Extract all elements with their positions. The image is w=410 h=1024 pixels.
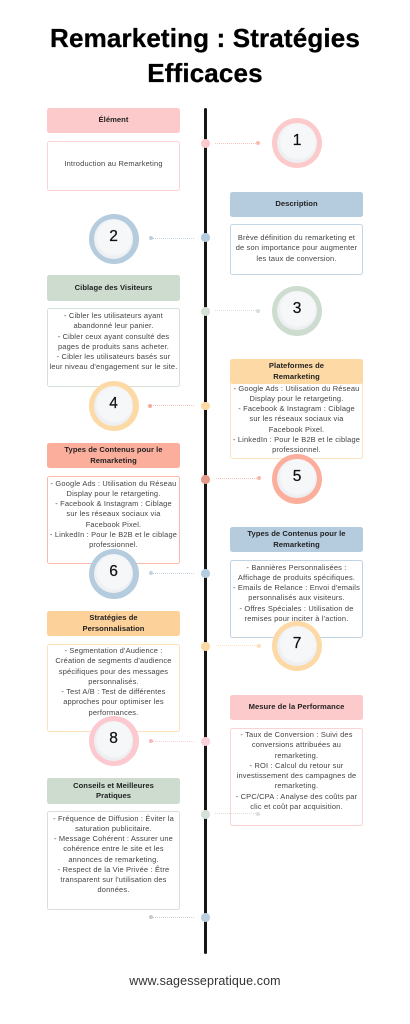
panel: types de contenus text left: professionnel. [89,540,138,549]
panel: plateformes text: professionnel. [272,445,321,454]
connector 3 [215,309,260,313]
marker 4 [201,402,210,410]
badge 3 [272,286,322,336]
panel: ciblage text: pages de produits sans acheter. [58,342,169,351]
panel: personnalisation text: performances. [89,708,138,716]
panel: plateformes text: Display pour le retargeting. [250,394,343,403]
panel: ciblage text: - Cibler les utilisateurs ayant [64,311,163,320]
connector 9 [215,812,260,816]
panel: plateformes text: Facebook Pixel. [269,424,324,434]
panel: types de contenus text left: - Google Ads : Utilisation du Réseau [51,478,176,488]
badge 7: 7 [293,635,301,652]
badge 4 [88,381,138,431]
panel: conseils heading: Conseils et Meilleures [73,780,154,790]
marker 8 [201,737,210,746]
panel: performance text: remarketing. [275,750,318,760]
panel: description heading [230,192,363,217]
title [50,23,360,88]
connector 2 [149,236,194,240]
panel: plateformes text [230,376,363,459]
panel: plateformes text: sur les réseaux sociaux via [249,414,344,423]
panel: description text: les taux de conversion. [256,254,337,262]
marker 10 [201,913,210,922]
badge 8: 8 [109,730,118,747]
panel: types de contenus text left: sur les réseaux sociaux via [66,509,161,518]
badge 3: 3 [293,300,301,317]
footer url: www.sagessepratique.com [129,974,281,988]
badge 2: 2 [109,228,118,245]
panel: conseils text: - Message Cohérent : Assurer une [54,834,173,843]
panel: personnalisation text: spécifiques pour des messages [59,666,168,676]
panel: types de contenus text right: - Offres Spéciales : Utilisation de [239,604,354,612]
panel: element heading [47,108,180,133]
panel: types de contenus text left: - LinkedIn : Pour le B2B et le ciblage [50,530,177,539]
panel: ciblage text [47,308,180,387]
connector 4 [148,404,194,408]
panel: performance text: - CPC/CPA : Analyse des coûts par [236,792,357,800]
panel: types de contenus heading right: Types de Contenus pour le [247,529,346,538]
panel: types de contenus text left: - Facebook & Instagram : Ciblage [55,499,172,508]
panel: performance text: conversions attribuées au [252,740,341,749]
panel: conseils text: - Fréquence de Diffusion : Éviter la [53,814,174,822]
panel: personnalisation heading [47,611,180,636]
panel: plateformes text: - Google Ads : Utilisation du Réseau [234,384,359,392]
panel: conseils heading [47,778,180,804]
badge 5 [272,454,322,504]
panel: conseils text [47,811,180,910]
panel: conseils text: données. [97,885,130,894]
panel: plateformes text: - LinkedIn : Pour le B2B et le ciblage [233,435,360,444]
panel: ciblage text: - Cibler les utilisateurs basés sur [57,352,170,361]
panel: ciblage heading: Ciblage des Visiteurs [75,283,152,292]
panel: element text: Introduction au Remarketing [64,159,163,168]
panel: personnalisation text: - Test A/B : Test de différentes [61,687,166,696]
title: Efficaces [147,58,263,88]
panel: conseils text: cohérence entre le site et les [63,844,164,853]
panel: types de contenus heading right [230,527,363,552]
panel: types de contenus text right: - Bannières Personnalisées : [246,562,347,572]
panel: personnalisation text: personnalisés. [88,677,139,686]
panel: performance text: - Taux de Conversion : Suivi des [240,730,353,739]
connector 6 [149,571,194,575]
panel: element heading: Élément [99,115,128,124]
connector 10 [149,915,194,919]
panel: performance text: - ROI : Calcul du retour sur [250,761,343,770]
badge 1: 1 [293,132,301,149]
panel: description text [230,224,363,275]
panel: personnalisation text: approches pour optimiser les [63,697,164,706]
panel: conseils text: transparent sur l'utilisation des [60,875,167,884]
panel: types de contenus text left: Facebook Pixel. [86,520,141,528]
panel: performance text: clic et coût par acquisition. [250,802,343,811]
panel: types de contenus heading left: Remarketing [90,456,137,464]
connector 8 [149,739,194,743]
timeline axis [204,108,207,954]
panel: ciblage text: - Cibler ceux ayant consulté des [58,332,169,340]
marker 6 [201,569,210,578]
marker 7 [201,642,210,650]
panel: performance text: investissement des campagnes de [237,771,356,780]
panel: personnalisation heading: Personnalisation [82,624,144,632]
panel: conseils text: saturation publicitaire. [75,824,152,833]
connector 5 [216,476,261,480]
panel: types de contenus text left [47,476,180,564]
panel: description heading: Description [275,199,318,208]
badge 6: 6 [109,563,118,580]
title: Remarketing : Stratégies [50,23,360,53]
panel: description text: de son importance pour augmenter [236,243,357,252]
panel: types de contenus heading left [47,443,180,468]
panel: conseils text: - Respect de la Vie Privée : Être [58,865,169,874]
panel: performance text [230,728,363,826]
panel: plateformes heading: Remarketing [273,372,320,380]
marker 5 [201,475,210,484]
badge 1 [272,118,322,168]
panel: types de contenus text right: Affichage de produits spécifiques. [238,573,355,582]
panel: performance heading: Mesure de la Performance [249,702,344,711]
connector 7 [216,644,261,648]
badge 8 [88,716,138,766]
marker 2 [201,233,210,242]
panel: personnalisation text [47,644,180,732]
panel: description text: Brève définition du remarketing et [238,233,355,242]
panel: types de contenus text right: personnalisés aux visiteurs. [248,593,345,602]
panel: types de contenus text right: remises pour inciter à l'action. [245,614,348,623]
panel: plateformes text: - Facebook & Instagram : Ciblage [238,404,355,413]
badge 4: 4 [109,395,118,412]
badge 5: 5 [293,468,301,485]
panel: plateformes heading [230,359,363,384]
panel: types de contenus text right [230,560,363,638]
panel: ciblage heading [47,275,180,301]
panel: types de contenus text left: Display pour le retargeting. [67,489,160,498]
panel: conseils heading: Pratiques [96,791,131,800]
panel: ciblage text: leur niveau d'engagement sur le site. [50,362,177,371]
panel: plateformes heading: Plateformes de [269,361,324,370]
badge 7 [272,621,322,671]
panel: performance text: remarketing. [275,781,318,790]
panel: performance heading [230,694,363,720]
panel: element text [47,141,180,191]
panel: personnalisation heading: Stratégies de [89,613,138,622]
panel: types de contenus heading left: Types de Contenus pour le [64,445,163,454]
panel: personnalisation text: - Segmentation d'Audience : [64,646,163,655]
panel: personnalisation text: Création de segments d'audience [55,656,172,665]
badge 2 [88,214,138,264]
badge 6 [88,548,138,598]
panel: types de contenus text right: - Emails de Relance : Envoi d'emails [233,583,360,592]
panel: conseils text: annonces de remarketing. [68,854,159,864]
marker 1 [201,139,210,148]
connector 1 [215,141,260,145]
marker 3 [201,307,210,316]
marker 9 [201,810,210,818]
panel: types de contenus heading right: Remarketing [273,540,320,548]
panel: ciblage text: abandonné leur panier. [73,321,154,330]
